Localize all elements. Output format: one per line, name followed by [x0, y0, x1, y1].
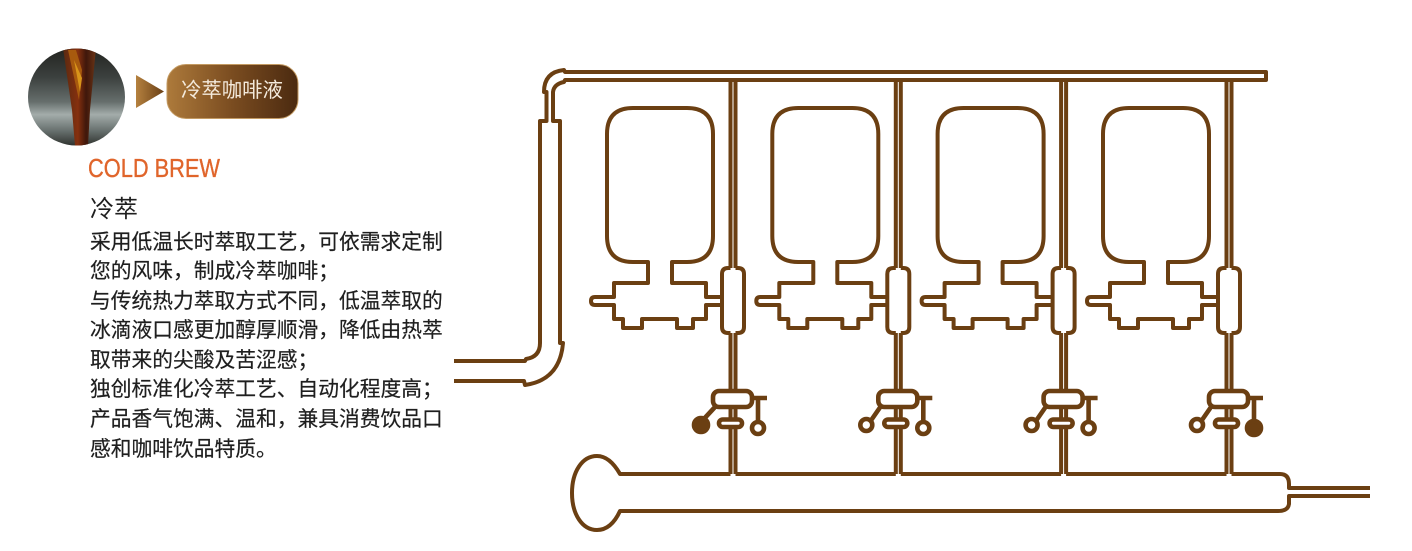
body text: 您的风味，制成冷萃咖啡；	[90, 260, 339, 283]
label pill: cold brew liquid: 冷萃咖啡液	[181, 79, 283, 102]
double pipe 2	[896, 80, 901, 474]
dosing box 3	[1053, 268, 1075, 333]
photo: coffee stream	[28, 48, 126, 146]
double pipe 4	[1226, 80, 1232, 474]
body text: 冰滴液口感更加醇厚顺滑，降低由热萃	[90, 319, 443, 342]
valve 2	[860, 391, 932, 434]
double pipe 3	[1061, 80, 1066, 474]
body text: 采用低温长时萃取工艺，可依需求定制	[90, 231, 443, 254]
label pill: cold brew liquid	[167, 64, 298, 118]
body text	[90, 231, 443, 461]
bottom collector pipe with outlet	[572, 456, 1370, 530]
dosing box 4	[1218, 268, 1240, 333]
tank 3	[922, 108, 1053, 328]
double pipe 1	[730, 80, 736, 474]
tank 2	[756, 108, 887, 328]
unit 2: tank, filter and valve	[756, 80, 932, 474]
valve 4	[1191, 391, 1263, 435]
body text: 取带来的尖酸及苦涩感；	[90, 349, 318, 372]
unit 1: tank, filter and valve	[591, 80, 767, 474]
inlet pipe and top manifold	[454, 70, 1266, 385]
tank 4	[1087, 108, 1218, 328]
heading: COLD BREW: COLD BREW	[88, 153, 220, 183]
dosing box 2	[887, 268, 909, 333]
unit 3: tank, filter and valve	[922, 80, 1098, 474]
unit 4: tank, filter and valve	[1087, 80, 1263, 474]
valve 1	[694, 391, 767, 434]
body text: 产品香气饱满、温和，兼具消费饮品口	[90, 408, 443, 431]
valve 3	[1026, 391, 1098, 434]
dosing box 1	[722, 268, 744, 333]
arrow: triangle	[136, 75, 164, 108]
subheading: 冷萃: 冷萃	[90, 196, 138, 223]
body text: 与传统热力萃取方式不同，低温萃取的	[90, 290, 443, 313]
body text: 感和咖啡饮品特质。	[90, 438, 277, 461]
body text: 独创标准化冷萃工艺、自动化程度高；	[90, 378, 443, 401]
tank 1	[591, 108, 722, 328]
